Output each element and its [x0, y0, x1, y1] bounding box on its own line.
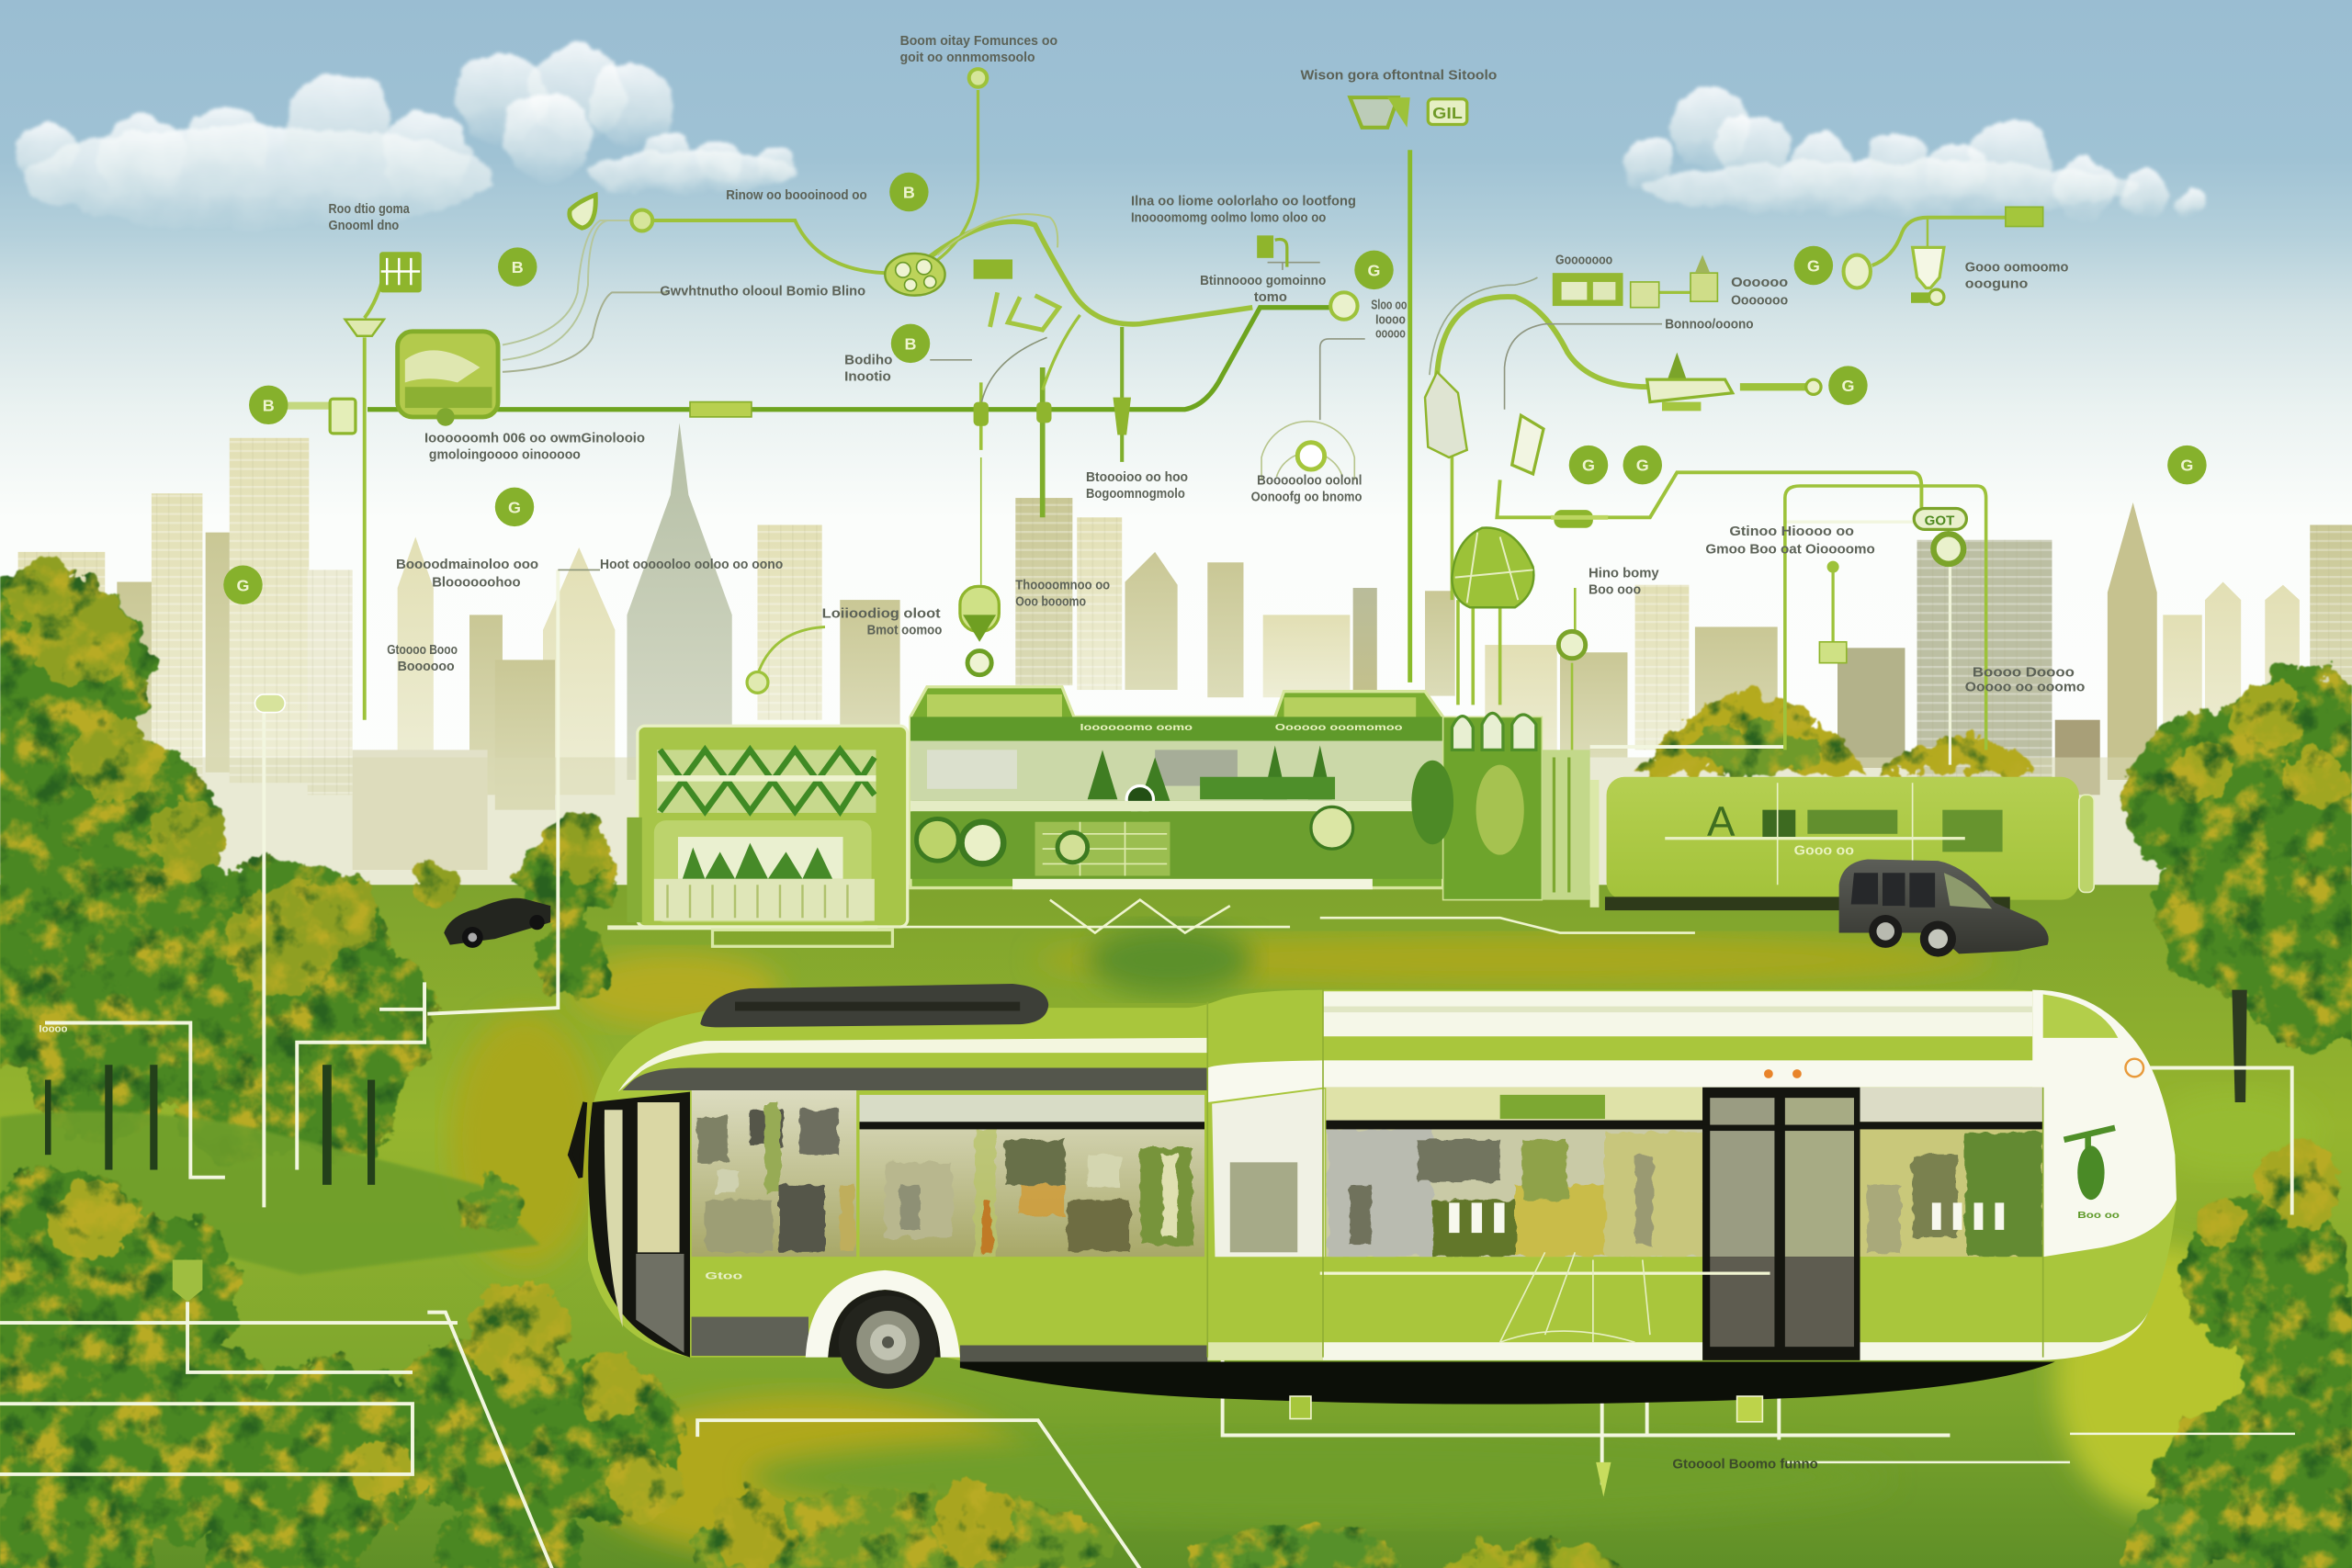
machine: main module: Oooooo ooomomoo	[1275, 723, 1403, 733]
callout labels: Ilna oo liome oolorlaho oo lootfong	[1131, 195, 1356, 209]
callout labels: Wison gora oftontnal Sitoolo	[1301, 69, 1497, 84]
right window	[1326, 1088, 1704, 1257]
callout labels: Ooooo oo ooomo	[1965, 681, 2085, 695]
gear cluster	[885, 254, 945, 296]
white route lines	[0, 522, 2295, 1568]
trees behind tank	[1638, 694, 2037, 777]
trees left	[0, 559, 615, 1162]
gauge ring marker	[1330, 292, 1358, 320]
module: control screen	[398, 332, 498, 426]
callout labels: Btinnoooo gomoinno	[1200, 274, 1326, 288]
bracket icon	[990, 292, 1059, 330]
tank module: A	[1707, 797, 1736, 844]
ring marker top	[969, 69, 987, 87]
bottom label: Gtooool Boomo funno	[1672, 1457, 1818, 1472]
badge: B	[905, 334, 917, 353]
skirt bands	[1323, 1342, 1702, 1360]
rear logo	[2064, 1128, 2120, 1221]
badge: G	[237, 576, 249, 594]
callout labels: goit oo onnmomsoolo	[900, 51, 1035, 65]
callout labels: Btoooioo oo hoo	[1086, 470, 1188, 485]
badge	[1569, 446, 1608, 484]
callout labels: Loiioodiog oloot	[822, 607, 941, 622]
pump module	[1647, 353, 1733, 411]
pipe coupling	[690, 402, 752, 417]
callout labels: Gnooml dno	[329, 219, 399, 233]
white belt band	[1207, 1060, 2043, 1102]
concentric gauge	[1261, 422, 1354, 479]
lower ring markers	[747, 534, 1963, 693]
callout labels: Thoooomnoo oo	[1015, 579, 1110, 593]
badge	[2167, 446, 2207, 484]
callout labels: Gooo oomoomo	[1965, 261, 2068, 276]
callout labels: Ioooooomh 006 oo owmGinolooio	[424, 432, 645, 446]
tree trunks left	[45, 1065, 375, 1185]
ring marker	[631, 210, 652, 231]
callout labels: Bodiho	[844, 354, 892, 368]
badge	[1354, 251, 1394, 289]
trees bottom centre	[690, 1480, 1620, 1568]
callout labels: Bogoomnogmolo	[1086, 487, 1185, 502]
machine: left module	[607, 726, 908, 946]
skyline	[0, 423, 2352, 892]
badge	[891, 324, 930, 363]
badge: G	[1368, 261, 1380, 279]
badge: G	[1582, 457, 1595, 475]
badge: B	[263, 396, 275, 414]
green pipe network	[365, 90, 2010, 765]
top bracket module	[1350, 97, 1467, 128]
tree trunk right	[2232, 990, 2247, 1102]
ring chain marker	[1844, 255, 1871, 288]
clouds left	[14, 45, 795, 228]
top bracket module: GIL	[1432, 104, 1463, 122]
clouds right	[1624, 87, 2205, 219]
front cab	[588, 1092, 690, 1358]
badge	[498, 247, 537, 287]
callout labels: Boooooloo oolonl	[1257, 473, 1362, 488]
callout labels: Sloo oo	[1371, 298, 1407, 312]
small car	[444, 898, 550, 948]
badge	[1828, 366, 1868, 405]
callout labels: Inootio	[844, 370, 891, 385]
main pipe	[368, 308, 1342, 410]
callout labels: oooguno	[1965, 276, 2028, 291]
callout labels: Hino bomy	[1589, 567, 1660, 581]
callout labels: Gtinoo Hioooo oo	[1729, 525, 1854, 539]
callout labels: Gwvhtnutho olooul Bomio Blino	[660, 285, 865, 299]
trees bottom left	[0, 1167, 683, 1568]
callout labels: Ooo booomo	[1015, 595, 1086, 610]
callout labels: Ioooo	[1375, 313, 1406, 328]
badge	[223, 566, 263, 604]
badge	[249, 386, 288, 424]
badge: G	[508, 498, 521, 516]
leaf battery	[1452, 527, 1533, 607]
machine: coil module	[1411, 713, 1590, 900]
callout labels: Boooodmainoloo ooo	[396, 558, 538, 572]
door	[1702, 1069, 1860, 1360]
right arc	[1437, 297, 1650, 387]
feeder lines	[922, 90, 978, 270]
drop icon	[570, 195, 595, 228]
hanging module	[1425, 372, 1467, 457]
CGT tag	[1914, 508, 1966, 529]
callout labels: Boom oitay Fomunces oo	[900, 34, 1057, 49]
machine: main module: Ioooooomo oomo	[1080, 723, 1193, 733]
rear logo: Boo oo	[2077, 1211, 2120, 1221]
middle window	[860, 1095, 1204, 1257]
badge	[889, 173, 929, 211]
callout labels: Gooooooo	[1555, 253, 1612, 267]
plant window	[654, 820, 875, 922]
bus body	[588, 990, 2177, 1360]
callout labels: Gmoo Boo oat Oioooomo	[1705, 542, 1875, 557]
callout labels: gmoloingoooo oinooooo	[429, 448, 581, 463]
tank module: Gooo oo	[1794, 844, 1854, 859]
tank module	[1590, 777, 2094, 910]
badge	[1623, 446, 1662, 484]
tablet	[1512, 415, 1544, 474]
mid panel glass	[1212, 1089, 1325, 1257]
bottom diagram markers	[173, 1259, 1762, 1496]
interior wiring overlay	[1500, 1252, 1650, 1342]
funnel	[345, 320, 384, 336]
badge: B	[903, 184, 915, 202]
callout labels: Bmot oomoo	[867, 624, 942, 638]
badge: B	[512, 258, 524, 276]
main electric bus	[570, 984, 2177, 1404]
callout labels: Hoot oooooloo ooloo oo oono	[600, 558, 783, 572]
white roof panel	[1323, 991, 2032, 1036]
plug	[2006, 207, 2043, 227]
callout labels: tomo	[1254, 290, 1287, 305]
callout labels: Oonoofg oo bnomo	[1251, 490, 1362, 504]
joint valve	[1551, 510, 1608, 528]
truss planter	[657, 750, 876, 813]
callout labels: Ooooooo	[1731, 293, 1788, 308]
under-machine white circuit traces	[900, 900, 1695, 933]
callout labels: Inoooomomg oolmo lomo oloo oo	[1131, 211, 1326, 226]
rear window	[1860, 1088, 2043, 1257]
roof battery pod	[700, 984, 1048, 1027]
callout labels: Boooooo	[398, 660, 455, 674]
left window	[692, 1090, 856, 1257]
callout labels: Boooo Doooo	[1973, 665, 2075, 680]
badge: G	[1841, 377, 1854, 395]
badge	[495, 488, 534, 526]
CGT tag: GOT	[1925, 513, 1954, 528]
callout labels: Roo dtio goma	[329, 202, 410, 217]
badge: G	[1636, 457, 1649, 475]
callout labels: Boo ooo	[1589, 583, 1641, 598]
badge: G	[2180, 457, 2193, 475]
valve clamps	[974, 398, 1131, 434]
wheel	[806, 1270, 960, 1389]
main electric bus: Gtoo	[705, 1271, 742, 1282]
callout labels: Bloooooohoo	[432, 575, 521, 590]
small green tag	[974, 259, 1012, 279]
funnel right module	[1911, 247, 1944, 304]
bus shadow	[960, 1362, 2055, 1404]
white rear	[2032, 990, 2177, 1257]
trees right	[2122, 668, 2352, 1568]
badge: G	[1807, 257, 1820, 276]
ground lawn	[0, 885, 2352, 1568]
lawn left clearing	[0, 1111, 540, 1275]
callout labels	[329, 34, 2085, 695]
infographic scene: Ioooo	[39, 1023, 68, 1034]
pod capsule	[960, 586, 999, 675]
machine: main module	[910, 687, 1443, 889]
panel row top right	[1553, 255, 1717, 308]
badge	[1794, 246, 1833, 285]
sensor box top left	[379, 252, 422, 292]
left side white stripe	[618, 1038, 1207, 1092]
callout labels: Rinow oo boooinood oo	[726, 188, 867, 203]
callout labels: ooooo	[1375, 326, 1406, 341]
small flag icon	[1257, 235, 1287, 267]
callout labels: Gtoooo Booo	[387, 643, 458, 658]
van car	[1839, 860, 2049, 957]
left connector box	[285, 399, 356, 434]
callout labels: Bonnoo/ooono	[1665, 318, 1754, 333]
callout labels: Oooooo	[1731, 276, 1788, 290]
green icon badges	[223, 173, 2207, 604]
lower right	[1497, 472, 1921, 517]
